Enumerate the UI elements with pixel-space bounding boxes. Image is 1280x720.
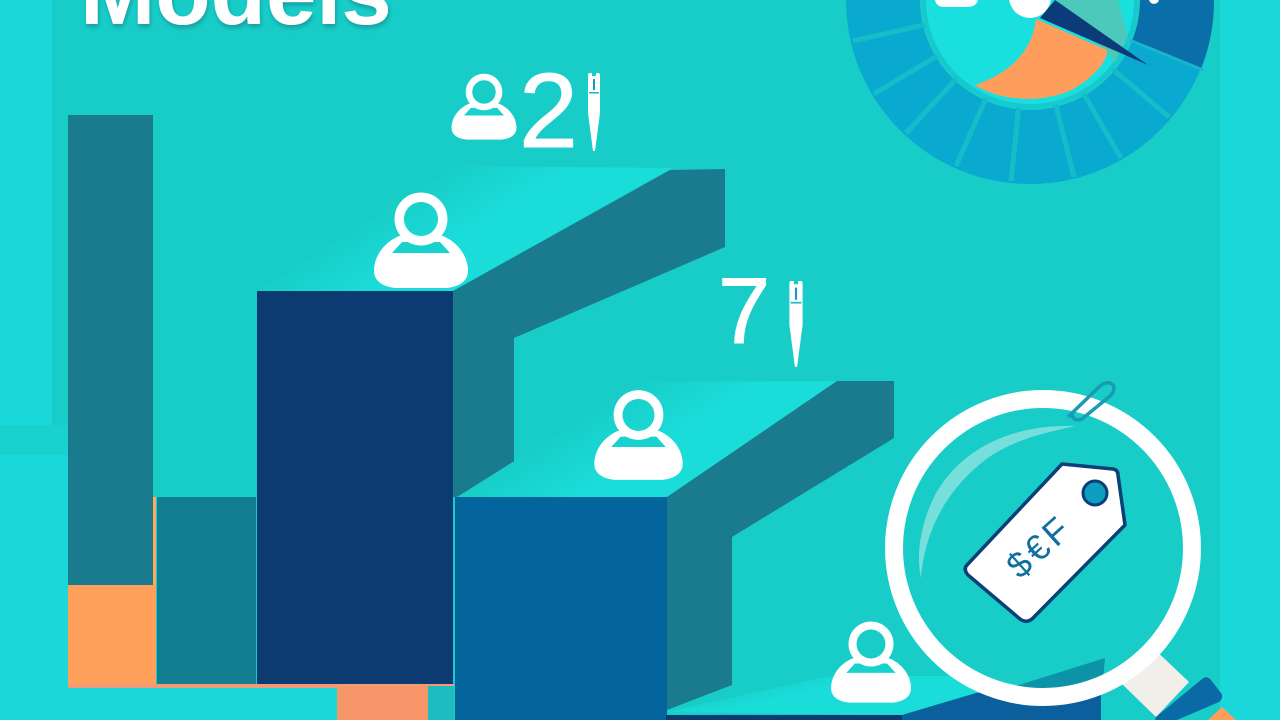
step 1 front <box>257 291 453 684</box>
magnifier ring <box>894 399 1192 697</box>
step 2 front <box>455 497 667 720</box>
step 2 side <box>667 381 894 710</box>
gauge <box>853 0 1214 181</box>
label: 2 with person <box>452 52 600 170</box>
step 2 top face <box>457 381 840 497</box>
bar: short teal <box>157 497 256 684</box>
baseline orange strip <box>68 684 454 720</box>
step 1 side <box>453 169 725 497</box>
label: 7: 7 <box>718 258 770 363</box>
step 2 <box>455 381 894 720</box>
gauge dial centre <box>926 0 1134 104</box>
person icon: step 1 <box>374 192 468 288</box>
gauge white blobs <box>935 0 1159 18</box>
gauge ring <box>853 0 1214 181</box>
magnifying glass <box>894 383 1236 720</box>
step 3 front <box>902 693 1101 720</box>
gauge dial <box>922 0 1138 108</box>
gauge teal wedge <box>1055 0 1128 62</box>
step 1 top face <box>257 166 672 291</box>
person icon: step 2 <box>594 390 683 480</box>
label: 7 <box>718 258 803 367</box>
step 3 top face <box>667 676 1019 715</box>
bar: tall teal with orange base <box>68 115 156 688</box>
price tag <box>965 464 1125 621</box>
step 3 side <box>976 658 1105 693</box>
step 1 <box>257 166 725 684</box>
gauge orange wedge <box>975 19 1107 99</box>
paperclip <box>1068 383 1114 420</box>
price tag: $€F <box>998 506 1081 586</box>
magnifier glare <box>919 426 1075 578</box>
label: 2 with person: 2 <box>519 52 578 170</box>
step 3 <box>666 658 1105 720</box>
gauge needle <box>1040 0 1148 65</box>
person icon: step 3 <box>831 621 911 703</box>
magnifier handle <box>1118 645 1236 720</box>
